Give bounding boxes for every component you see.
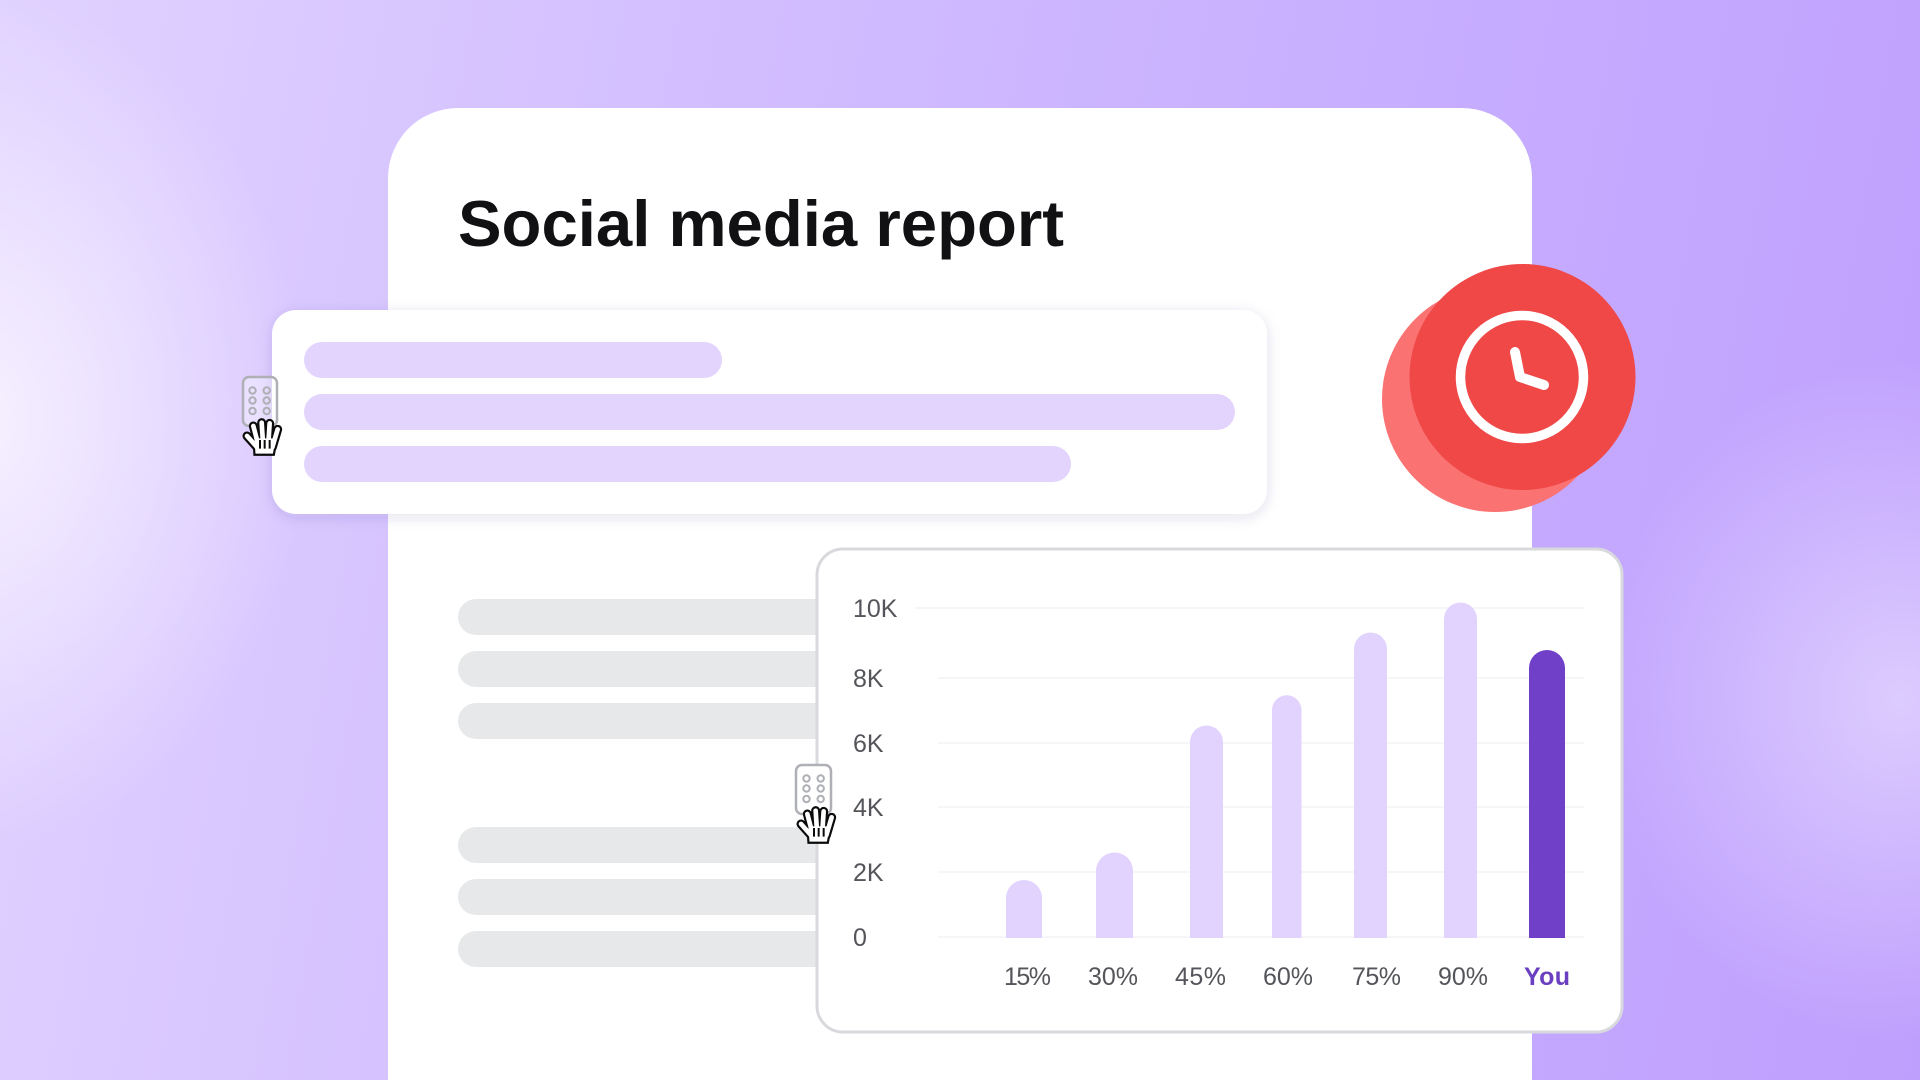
x axis labels: 45% — [1175, 963, 1226, 991]
y axis labels: 2K — [853, 859, 884, 887]
y axis labels: 10K — [853, 595, 898, 623]
icon: drag handle on text card — [243, 377, 277, 426]
x axis labels — [1004, 963, 1488, 991]
y axis labels: 0 — [853, 924, 867, 952]
bars — [1006, 602, 1477, 938]
y axis labels — [853, 595, 898, 952]
x axis labels: 15% — [1004, 963, 1051, 991]
y axis labels: 4K — [853, 794, 884, 822]
y axis labels: 8K — [853, 665, 884, 693]
panel: bar chart card — [817, 549, 1622, 1032]
title: Social media report — [458, 187, 1064, 260]
x axis labels: 30% — [1088, 963, 1138, 991]
icon: grabbing hand cursor on text card — [247, 423, 278, 451]
panel: report document — [388, 108, 1532, 1080]
chart grid lines — [915, 608, 1584, 937]
bar: You — [1529, 650, 1565, 938]
icon: drag handle on chart card — [796, 765, 831, 814]
gray text placeholders — [458, 599, 858, 967]
x axis labels: 60% — [1263, 963, 1313, 991]
x axis labels: 75% — [1352, 963, 1401, 991]
icon: grabbing hand cursor on chart card — [801, 811, 832, 839]
panel: highlighted text card — [272, 310, 1267, 514]
y axis labels: 6K — [853, 730, 884, 758]
x axis labels: 90% — [1438, 963, 1488, 991]
icon: red clock badge — [1382, 264, 1636, 512]
x axis label: You: You — [1524, 963, 1570, 991]
